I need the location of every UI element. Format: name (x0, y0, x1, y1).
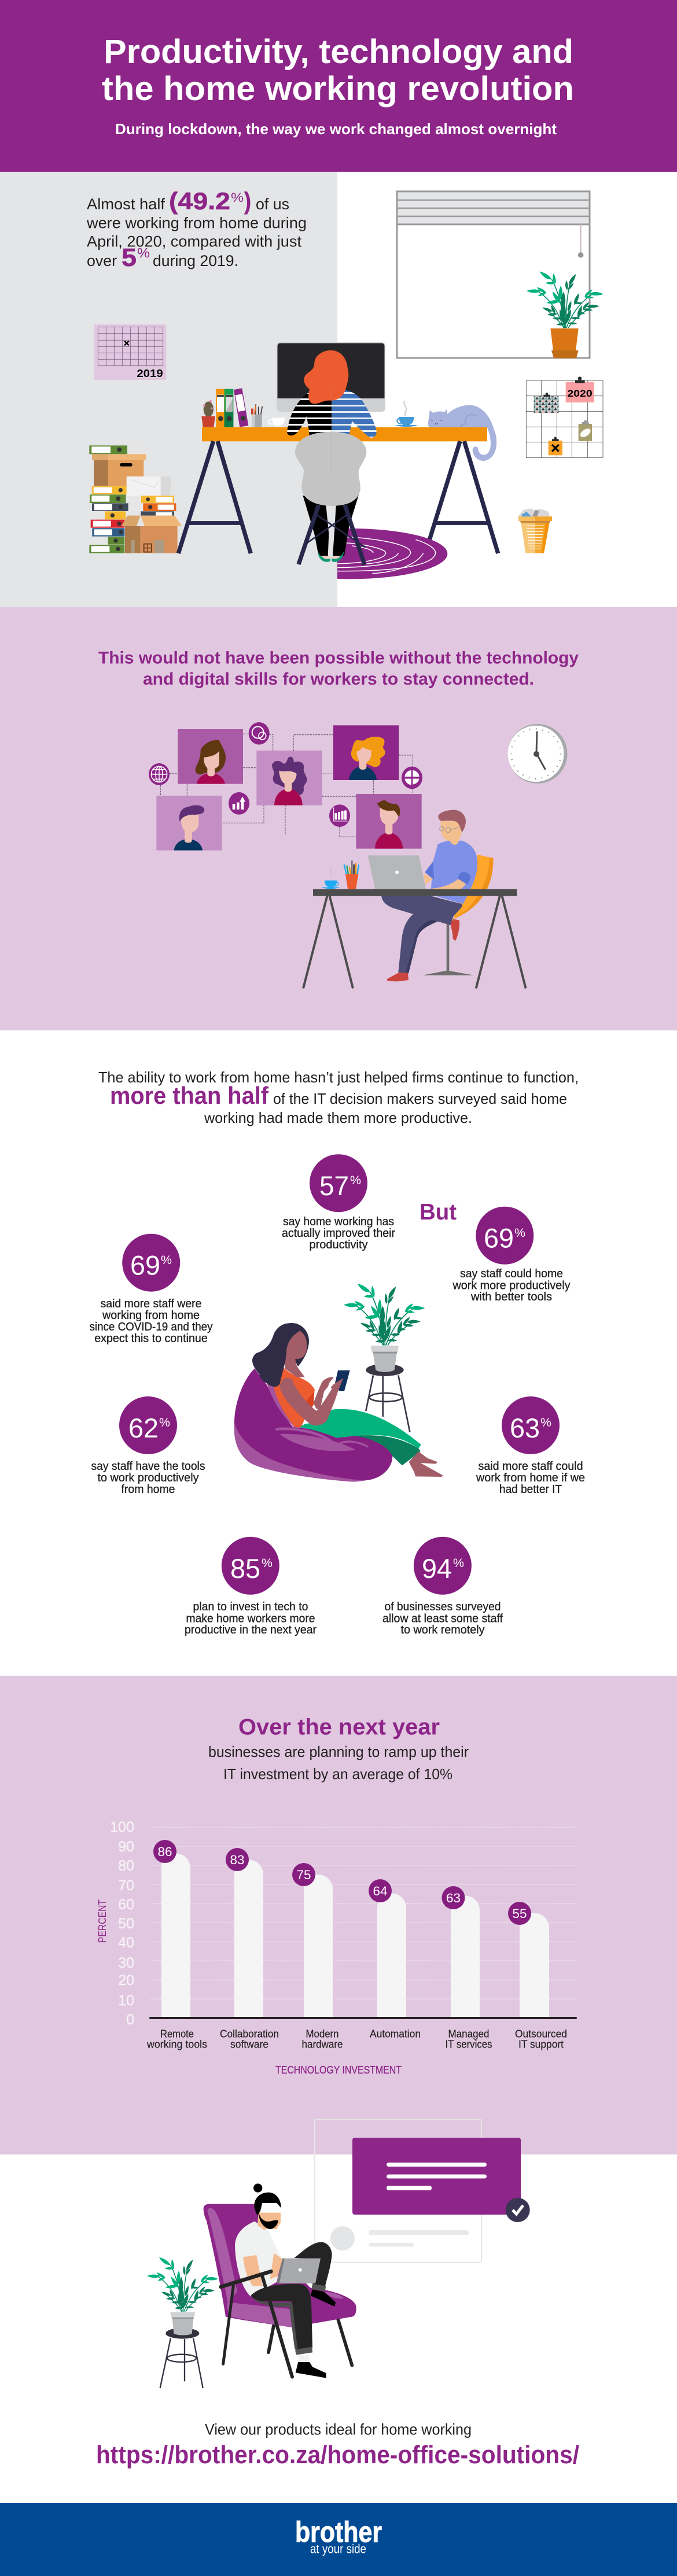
call to action: View our products ideal for home working (205, 2420, 472, 2438)
stat: 69% better tools: 69 (484, 1223, 514, 1254)
top and trousers (274, 1368, 443, 1477)
stat: 62%: say staff have the tools (91, 1460, 205, 1473)
icon: plant beside armchair (147, 2256, 218, 2388)
category labels: Modern (306, 2028, 339, 2039)
head and hair (252, 1323, 309, 1387)
category labels: working tools (146, 2039, 207, 2050)
category labels: Automation (370, 2028, 421, 2039)
intro stat text (86, 187, 307, 272)
stat: 85%: make home workers more (186, 1612, 315, 1625)
panel: investment chart (97, 1714, 577, 2076)
stat: 85%: 85 (230, 1553, 260, 1584)
but label: But (420, 1200, 457, 1225)
striped sweater (287, 389, 377, 438)
title: the home working revolution (102, 70, 574, 108)
intro text: more than half (110, 1082, 269, 1109)
trousers and socks (387, 902, 459, 981)
avatar: long brown hair woman (178, 729, 243, 784)
stat: 85%: plan to invest in tech to (193, 1601, 308, 1613)
stat: 69% better tools: % (514, 1226, 525, 1240)
sub heading (208, 1743, 469, 1783)
person at desk seen from behind (287, 350, 377, 565)
intro text: of the IT decision makers surveyed said home (273, 1090, 567, 1107)
y axis values: 0 (126, 2012, 134, 2028)
stat: 69% better tools: work more productively (452, 1279, 571, 1292)
intro stat text: were working from home during (86, 214, 307, 231)
heading: This would not have been possible without the technology (98, 649, 579, 667)
stat: 57%: actually improved their (282, 1227, 395, 1240)
category labels: IT support (518, 2039, 564, 2050)
stat: 63%: said more staff could (478, 1460, 583, 1473)
pen pot (344, 860, 359, 889)
icon: linked rings (249, 722, 270, 745)
y axis values: 20 (118, 1972, 134, 1989)
y axis title: PERCENT (97, 1899, 108, 1943)
stack of binders and boxes (88, 445, 182, 553)
man working at laptop (303, 810, 526, 988)
bean bag (234, 1369, 392, 1482)
value bubbles: 63 (446, 1891, 461, 1905)
armrest and front leg (221, 2271, 292, 2377)
outline card behind purple message (315, 2120, 481, 2262)
category labels: hardware (302, 2039, 343, 2050)
x axis title: TECHNOLOGY INVESTMENT (275, 2064, 402, 2076)
avatar: curly purple hair woman (256, 751, 322, 805)
desk items: cactus, binders, pencils, cup (201, 388, 285, 427)
sub heading: IT investment by an average of 10% (223, 1765, 452, 1783)
y axis values: 10 (118, 1993, 134, 2009)
stat: 69% since COVID-19: said more staff were (101, 1298, 201, 1310)
icon: window plant (527, 270, 604, 358)
arms (279, 1377, 339, 1425)
stat: 69% since COVID-19: % (161, 1254, 172, 1267)
armchair (204, 2204, 356, 2366)
man in armchair with laptop (204, 2183, 356, 2378)
icon: check badge (506, 2198, 530, 2222)
stat: 69% since COVID-19: expect this to continue (94, 1332, 208, 1345)
stat: 94% (382, 1537, 503, 1636)
value bubbles: 83 (230, 1853, 244, 1867)
monitor (277, 342, 385, 412)
stat: 69% since COVID-19 (89, 1234, 213, 1345)
icon: coffee cup (395, 401, 418, 427)
woman on bean bag with plant (234, 1283, 443, 1482)
mesh board with clipped notes (526, 376, 603, 457)
head with top-knot and beard (253, 2183, 281, 2230)
heading: and digital skills for workers to stay connected. (143, 670, 534, 689)
stat: 62% (91, 1396, 205, 1496)
x axis line (149, 2017, 577, 2019)
stat: 85% (185, 1537, 317, 1636)
torso and arms (424, 840, 477, 904)
panel: staying connected (98, 649, 579, 988)
header banner (0, 0, 677, 172)
stat: 69% since COVID-19: since COVID-19 and they (89, 1321, 213, 1333)
rug (337, 528, 448, 579)
stat: 69% since COVID-19: working from home (102, 1309, 200, 1322)
stat: 63%: 63 (510, 1413, 540, 1443)
intro text (98, 1069, 579, 1126)
icon: bar chart (329, 804, 350, 827)
intro stat text: Almost half (87, 195, 165, 213)
stat: 94%: % (453, 1557, 464, 1570)
icon: waste paper bin (518, 508, 552, 553)
hair (304, 350, 348, 404)
laptop (368, 855, 426, 889)
website link: https://brother.co.za/home-office-solutions/ (96, 2441, 579, 2469)
intro stat text: % (231, 190, 244, 205)
intro stat text: of us (256, 195, 289, 213)
stat: 57%: say home working has (283, 1215, 394, 1228)
stat: 63%: work from home if we (476, 1472, 585, 1484)
icon: wall clock (508, 724, 567, 783)
avatar: brown hair man (356, 794, 422, 849)
avatar: curly orange hair woman (333, 725, 399, 780)
y axis values: 40 (118, 1935, 134, 1951)
bars (161, 1853, 549, 2017)
icon: globe (149, 763, 170, 785)
stat: 57% (282, 1154, 395, 1251)
calendar 2019 and desk stacks (88, 324, 285, 553)
calendar 2019: 2019 (137, 367, 163, 379)
stool legs (299, 505, 366, 565)
icon: sleeping cat (428, 405, 496, 461)
stat: 94%: allow at least some staff (382, 1612, 503, 1625)
sub heading: businesses are planning to ramp up their (208, 1743, 469, 1761)
table top and legs (303, 889, 526, 988)
video call network (149, 722, 422, 851)
panel: productivity stats (89, 1069, 585, 1636)
value bubbles (153, 1840, 531, 1925)
icon: rising bars (229, 792, 249, 815)
y axis values: 60 (118, 1897, 134, 1913)
right wall: cup, cat, mesh board, bin (395, 376, 603, 553)
category labels: Outsourced (515, 2028, 567, 2039)
stat: 69% better tools: with better tools (470, 1291, 552, 1303)
shirt and arm (235, 2222, 282, 2297)
desk with trestle legs (178, 427, 498, 553)
stat: 63%: % (540, 1416, 551, 1429)
y axis values: 50 (118, 1916, 134, 1932)
stat: 85%: % (262, 1557, 273, 1570)
stat: 94%: to work remotely (400, 1624, 485, 1636)
head (438, 810, 466, 845)
logo wordmark: brother (295, 2516, 382, 2548)
chair back (295, 389, 366, 506)
stat: 57%: % (350, 1174, 361, 1187)
purple message card (352, 2138, 530, 2222)
coffee cup (321, 868, 340, 889)
stat: 62%: from home (122, 1483, 175, 1496)
category labels (146, 2028, 567, 2050)
y axis values: 90 (118, 1839, 134, 1855)
bar chart (97, 1819, 577, 2076)
stat: 62%: 62 (128, 1413, 159, 1443)
stat: 63% (476, 1396, 585, 1496)
stat: 94%: of businesses surveyed (384, 1601, 501, 1613)
stat: 57%: 57 (319, 1170, 349, 1201)
avatar: man with quiff (156, 796, 222, 851)
call to action (96, 2420, 579, 2469)
category labels: Managed (448, 2028, 490, 2039)
laptop on lap (277, 2259, 321, 2283)
calendar 2019 (94, 324, 166, 380)
category labels: software (230, 2039, 268, 2050)
gridlines (150, 1827, 576, 1999)
trousers, cuff and shoe (251, 2284, 326, 2378)
plant on stool (344, 1283, 425, 1432)
intro stat text: April, 2020, compared with just (87, 232, 301, 250)
stat: 62%: % (159, 1416, 170, 1429)
y axis values (110, 1819, 134, 2028)
chair and stool (422, 855, 493, 975)
intro stat text: (49.2 (169, 187, 230, 215)
heading: Over the next year (238, 1714, 440, 1739)
crossed leg (381, 895, 462, 925)
legs and shoes (303, 491, 360, 562)
bent raised leg (294, 2242, 336, 2307)
footer with brother logo (0, 2503, 677, 2576)
intro stat text: ) (244, 187, 251, 215)
value bubbles: 86 (157, 1845, 172, 1859)
window with blind (397, 191, 590, 358)
icon: pie chart (402, 767, 422, 789)
mesh board with clipped notes: 2020 (567, 388, 593, 399)
stat: 57%: productivity (309, 1239, 368, 1251)
panel: lockdown home office (0, 172, 604, 607)
stat: 62%: to work productively (97, 1472, 199, 1484)
value bubbles: 55 (513, 1906, 527, 1921)
intro stat text: over (87, 252, 117, 269)
y axis values: 70 (118, 1878, 134, 1894)
category labels: IT services (446, 2039, 492, 2050)
y axis values: 100 (110, 1819, 134, 1835)
value bubbles: 64 (373, 1884, 388, 1898)
stat: 69% since COVID-19: 69 (130, 1250, 160, 1281)
heading (98, 649, 579, 689)
stat: 69% better tools (452, 1207, 571, 1303)
y axis values: 80 (118, 1858, 134, 1874)
value bubbles: 75 (296, 1868, 311, 1882)
intro text: working had made them more productive. (204, 1109, 472, 1126)
category labels: Collaboration (220, 2028, 279, 2039)
phone (331, 1370, 350, 1392)
connector lines (160, 734, 413, 837)
title: Productivity, technology and (104, 33, 573, 71)
intro stat text: 5 (122, 243, 137, 272)
stat: 85%: productive in the next year (185, 1624, 317, 1636)
logo wordmark: at your side (310, 2542, 366, 2556)
stat: 63%: had better IT (499, 1483, 562, 1496)
subtitle: During lockdown, the way we work changed almost overnight (115, 120, 557, 138)
category labels: Remote (160, 2028, 194, 2039)
title (102, 33, 574, 108)
y axis values: 30 (118, 1955, 134, 1971)
intro text: The ability to work from home hasn’t just helped firms continue to function, (98, 1069, 579, 1086)
intro stat text: % (137, 245, 150, 261)
stat: 94%: 94 (422, 1553, 452, 1584)
intro stat text: during 2019. (153, 252, 238, 269)
stat: 69% better tools: say staff could home (460, 1267, 563, 1280)
